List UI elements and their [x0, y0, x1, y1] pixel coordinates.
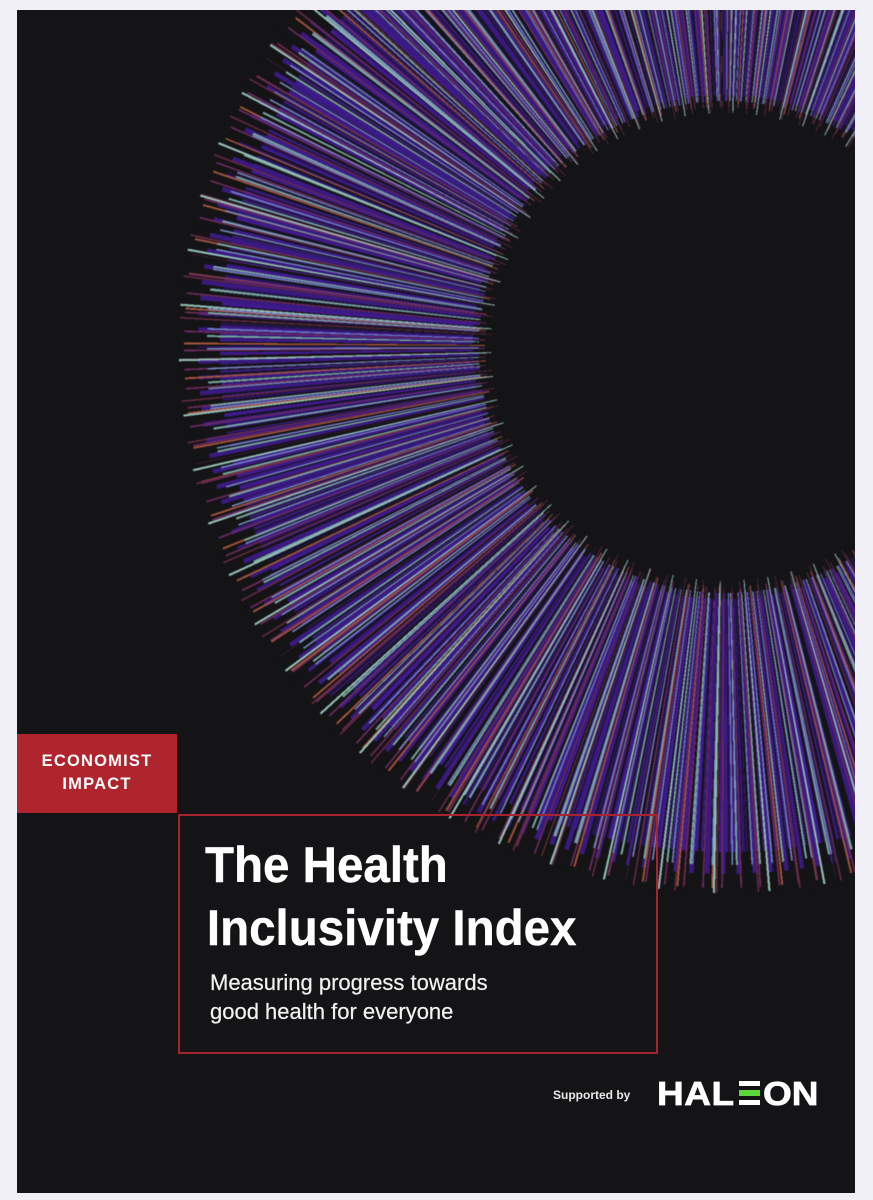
- title panel: [178, 814, 658, 1054]
- logo E bar green: [739, 1090, 760, 1096]
- heading: The Health: [205, 837, 448, 893]
- brand block: Economist Impact: [17, 734, 177, 813]
- heading: [205, 837, 576, 956]
- heading: Inclusivity Index: [207, 900, 576, 956]
- brand block: Economist Impact: IMPACT: [62, 775, 132, 793]
- subtitle: good health for everyone: [210, 999, 453, 1024]
- radial burst graphic: [178, 10, 855, 894]
- supported by label: Supported by: [553, 1088, 630, 1102]
- logo E bar top: [739, 1081, 760, 1086]
- logo text right: ON: [763, 1074, 818, 1112]
- subtitle: Measuring progress towards: [210, 970, 488, 995]
- logo E bar bottom: [739, 1100, 760, 1105]
- logo: Haleon: [657, 1074, 818, 1112]
- subtitle: [210, 970, 488, 1024]
- brand block: Economist Impact: ECONOMIST: [42, 752, 152, 770]
- logo text left: HAL: [657, 1074, 735, 1112]
